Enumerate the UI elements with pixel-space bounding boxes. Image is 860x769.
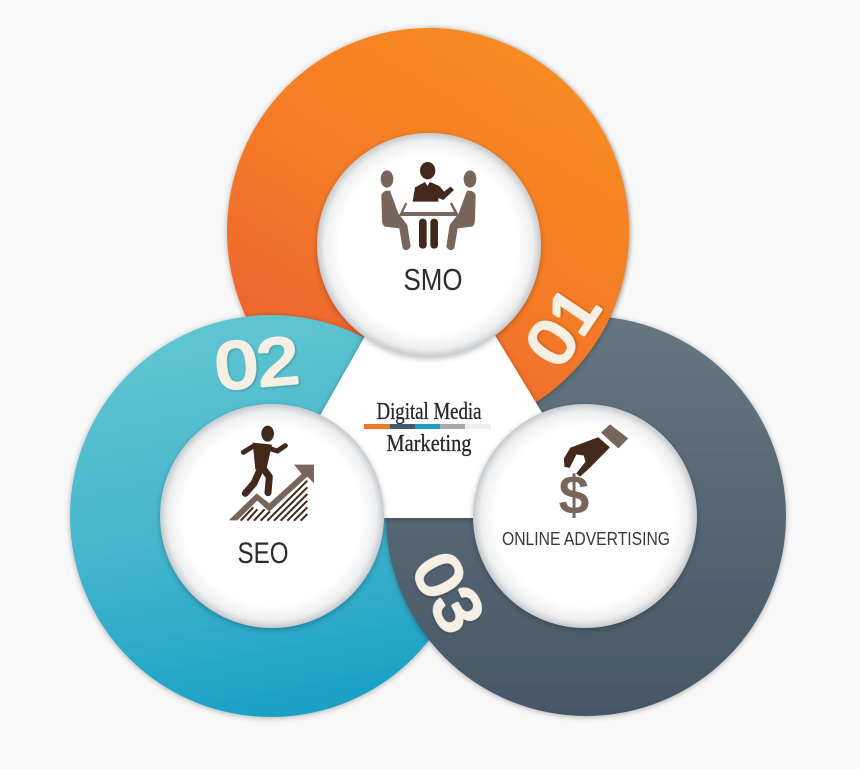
icon: man climbing chart [229,426,314,521]
circle: SMO [317,133,541,357]
center white triangle [262,225,606,518]
icon: meeting people [381,162,476,250]
circle: Online Advertising [473,404,697,628]
infographic: digital media marketing venn diagram [66,24,790,722]
ring: teal 02 [70,315,472,717]
ring: slate 03 [386,316,786,716]
circle: SEO [160,404,384,628]
number 01: 01 [513,275,615,379]
title line 2: Marketing [386,431,472,457]
ring: orange 01 [227,28,629,434]
colour bar [364,424,491,429]
label: SMO: SMO [404,262,462,297]
ring: orange 01 overlap over slate [428,26,632,404]
title line 1: Digital Media [376,399,482,425]
label: ONLINE ADVERTISING: ONLINE ADVERTISING [502,529,670,549]
label: SEO: SEO [238,537,288,570]
icon: hand with dollar: $ [559,464,589,526]
number 03: 03 [398,541,497,644]
icon: hand with dollar [559,424,628,526]
center title [364,399,491,457]
number 02: 02 [213,323,302,404]
